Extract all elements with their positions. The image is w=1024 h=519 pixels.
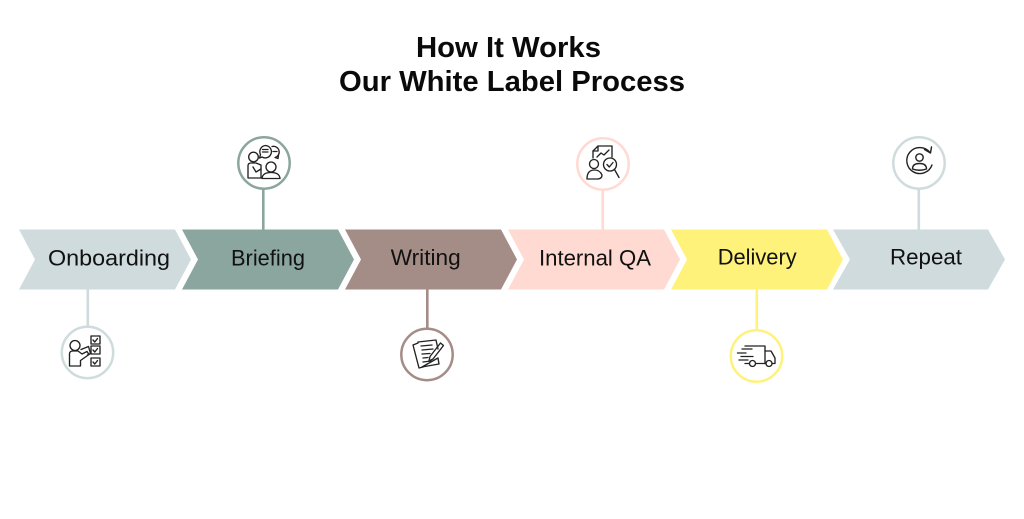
icon: report review with magnifier — [577, 138, 629, 190]
label: Briefing: Briefing — [231, 246, 305, 271]
chevron: Onboarding — [19, 230, 191, 290]
title — [339, 32, 685, 98]
panel: Repeat step — [833, 137, 1005, 290]
panel: Writing step — [345, 230, 517, 380]
panel: Briefing step — [182, 137, 354, 290]
connector: Repeat — [918, 189, 920, 230]
label: Repeat: Repeat — [890, 244, 963, 269]
chevron: Writing — [345, 230, 517, 290]
icon: person with checklist — [62, 327, 113, 378]
icon: person in refresh arrow — [893, 137, 945, 189]
icon: delivery truck — [731, 330, 782, 382]
icon: two people talking — [238, 137, 290, 189]
connector: Writing — [426, 289, 429, 328]
chevron: Repeat — [833, 230, 1005, 290]
panel: Onboarding step — [19, 230, 191, 378]
panel: Internal QA step — [508, 138, 680, 290]
chevron: Internal QA — [508, 230, 680, 290]
label: Delivery: Delivery — [718, 244, 797, 270]
connector: Onboarding — [86, 289, 89, 327]
connector: Delivery — [756, 289, 758, 330]
connector: Briefing — [262, 189, 265, 230]
label: Onboarding: Onboarding — [48, 246, 170, 271]
panel: Delivery step — [671, 230, 843, 382]
title: Our White Label Process — [339, 66, 685, 98]
label: Internal QA: Internal QA — [539, 246, 651, 271]
chevron: Delivery — [671, 230, 843, 290]
title: How It Works — [416, 32, 601, 64]
chevron: Briefing — [182, 230, 354, 290]
label: Writing: Writing — [391, 245, 461, 270]
icon: documents and pen — [401, 329, 453, 380]
connector: Internal QA — [602, 190, 604, 230]
